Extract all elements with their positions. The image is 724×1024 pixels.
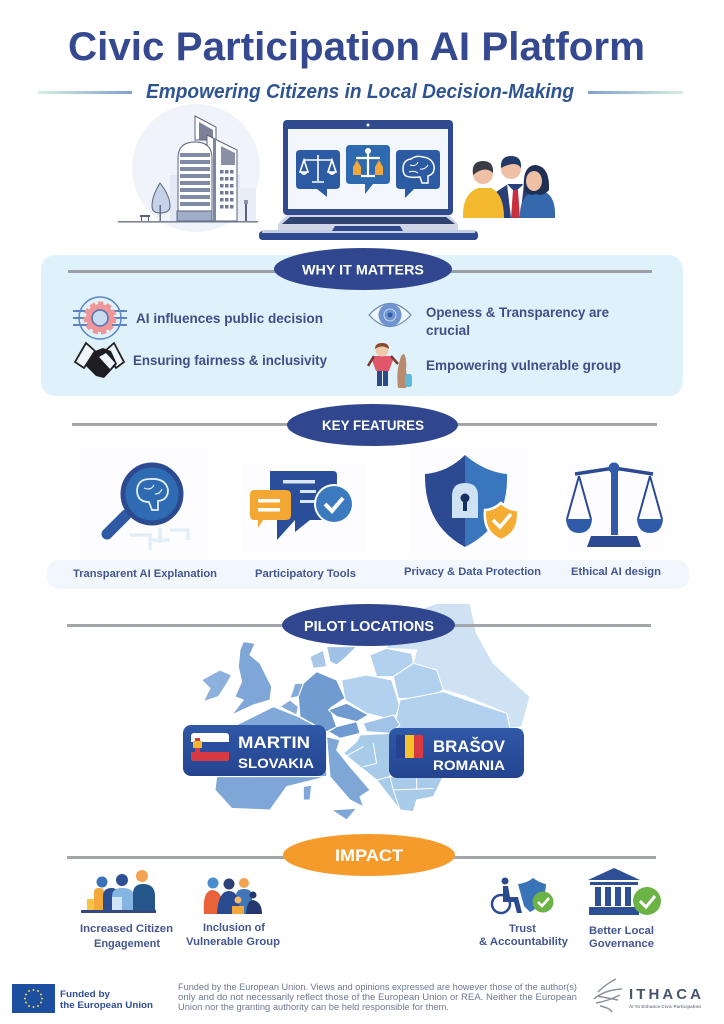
feature: ethical AI design [566,462,664,552]
text: increased citizen engagement: Engagement [94,938,160,950]
footer: disclaimer: only and do not necessarily reflect those of the European Union or REA. Neither the European [178,992,577,1002]
footer: ITHACA logo: AI To Enhance Civic Participation [629,1004,701,1010]
heading: why it matters: WHY IT MATTERS [302,262,424,278]
text: Ensuring fairness & inclusivity: Ensuring fairness & inclusivity [133,352,327,368]
badge: Brasov Romania: BRAŠOV [433,737,506,756]
heading: key features: KEY FEATURES [322,417,424,433]
icon: diverse group [204,878,262,914]
footer: ITHACA logo [594,979,701,1012]
text: inclusion of vulnerable group [186,922,280,948]
text: Openess & Transparency are crucial: Openess & Transparency are [426,304,609,320]
subtitle with side rules [38,81,683,103]
badge: Martin Slovakia [183,725,326,776]
text: better local governance: Governance [589,938,654,950]
section: pilot locations [67,603,651,820]
badge: Martin Slovakia: SLOVAKIA [238,755,314,771]
heading: pilot locations [282,604,455,646]
label strip [47,560,689,589]
icon: handshake [75,343,124,378]
footer: EU funding logo: the European Union [60,1000,153,1011]
text: increased citizen engagement [80,923,173,950]
heading: impact [283,834,455,876]
feature: privacy and data protection [410,448,530,558]
subtitle with side rules: Empowering Citizens in Local Decision-Making [146,81,574,103]
text: inclusion of vulnerable group: Vulnerable Group [186,936,280,948]
footer: EU funding logo [12,984,153,1013]
text: better local governance [589,925,654,950]
panel: why it matters [41,248,683,396]
icon: eye [369,304,411,326]
illustration: three citizens [463,156,555,218]
feature label: Participatory Tools [255,568,356,580]
footer: disclaimer: Union nor the granting authority can be held responsible for them. [178,1002,449,1012]
text: Empowering vulnerable group: Empowering vulnerable group [426,357,621,373]
bubble: scales with gold pans [346,145,390,194]
title: Civic Participation AI Platform [68,25,645,69]
impact: increased citizen engagement [80,870,173,950]
text: Openess & Transparency are crucial: crucial [426,322,470,338]
icon: wheelchair, shield and check [492,878,554,913]
footer: EU funding logo: Funded by [60,989,111,1000]
text: increased citizen engagement: Increased Citizen [80,923,173,935]
map of Europe [202,603,530,820]
text: inclusion of vulnerable group: Inclusion of [203,922,265,934]
impact: better local governance [588,868,661,950]
icon: civic building with check [588,868,661,915]
impact: trust and accountability [479,878,569,948]
text: trust and accountability: Trust [509,923,536,935]
impact: inclusion of vulnerable group [186,878,280,948]
feature: participatory tools [243,462,365,552]
heading: why it matters [274,248,452,290]
text: trust and accountability: & Accountability [479,936,569,948]
section: key features [47,404,689,589]
heading: impact: IMPACT [335,846,404,865]
text: AI influences public decision: AI influences public decision [136,310,323,326]
feature label: Ethical AI design [571,566,661,578]
badge: Martin Slovakia: MARTIN [238,733,310,752]
badge: Brasov Romania [389,728,524,778]
badge: Brasov Romania: ROMANIA [433,757,505,773]
feature label: Transparent AI Explanation [73,568,217,580]
footer: disclaimer [178,982,577,1012]
footer: ITHACA logo: ITHACA [629,986,701,1003]
text: Openess & Transparency are crucial [426,304,609,338]
illustration: laptop with three speech bubbles [259,120,478,240]
feature: transparent AI explanation [79,446,209,558]
bubble: brain [396,150,440,198]
heading: pilot locations: PILOT LOCATIONS [304,619,434,635]
heading: key features [287,404,458,446]
footer: disclaimer: Funded by the European Union. Views and opinions expressed are however those of the author(s) [178,982,577,992]
text: trust and accountability [479,923,569,948]
section: impact [67,834,661,950]
bubble: scales [296,150,340,197]
icon: group on steps [81,870,156,913]
illustration: city building [118,104,260,232]
icon: person with support hand [368,343,412,388]
text: better local governance: Better Local [589,925,654,937]
feature label: Privacy & Data Protection [404,566,541,578]
icon: AI gear with circuit lines [73,297,127,339]
